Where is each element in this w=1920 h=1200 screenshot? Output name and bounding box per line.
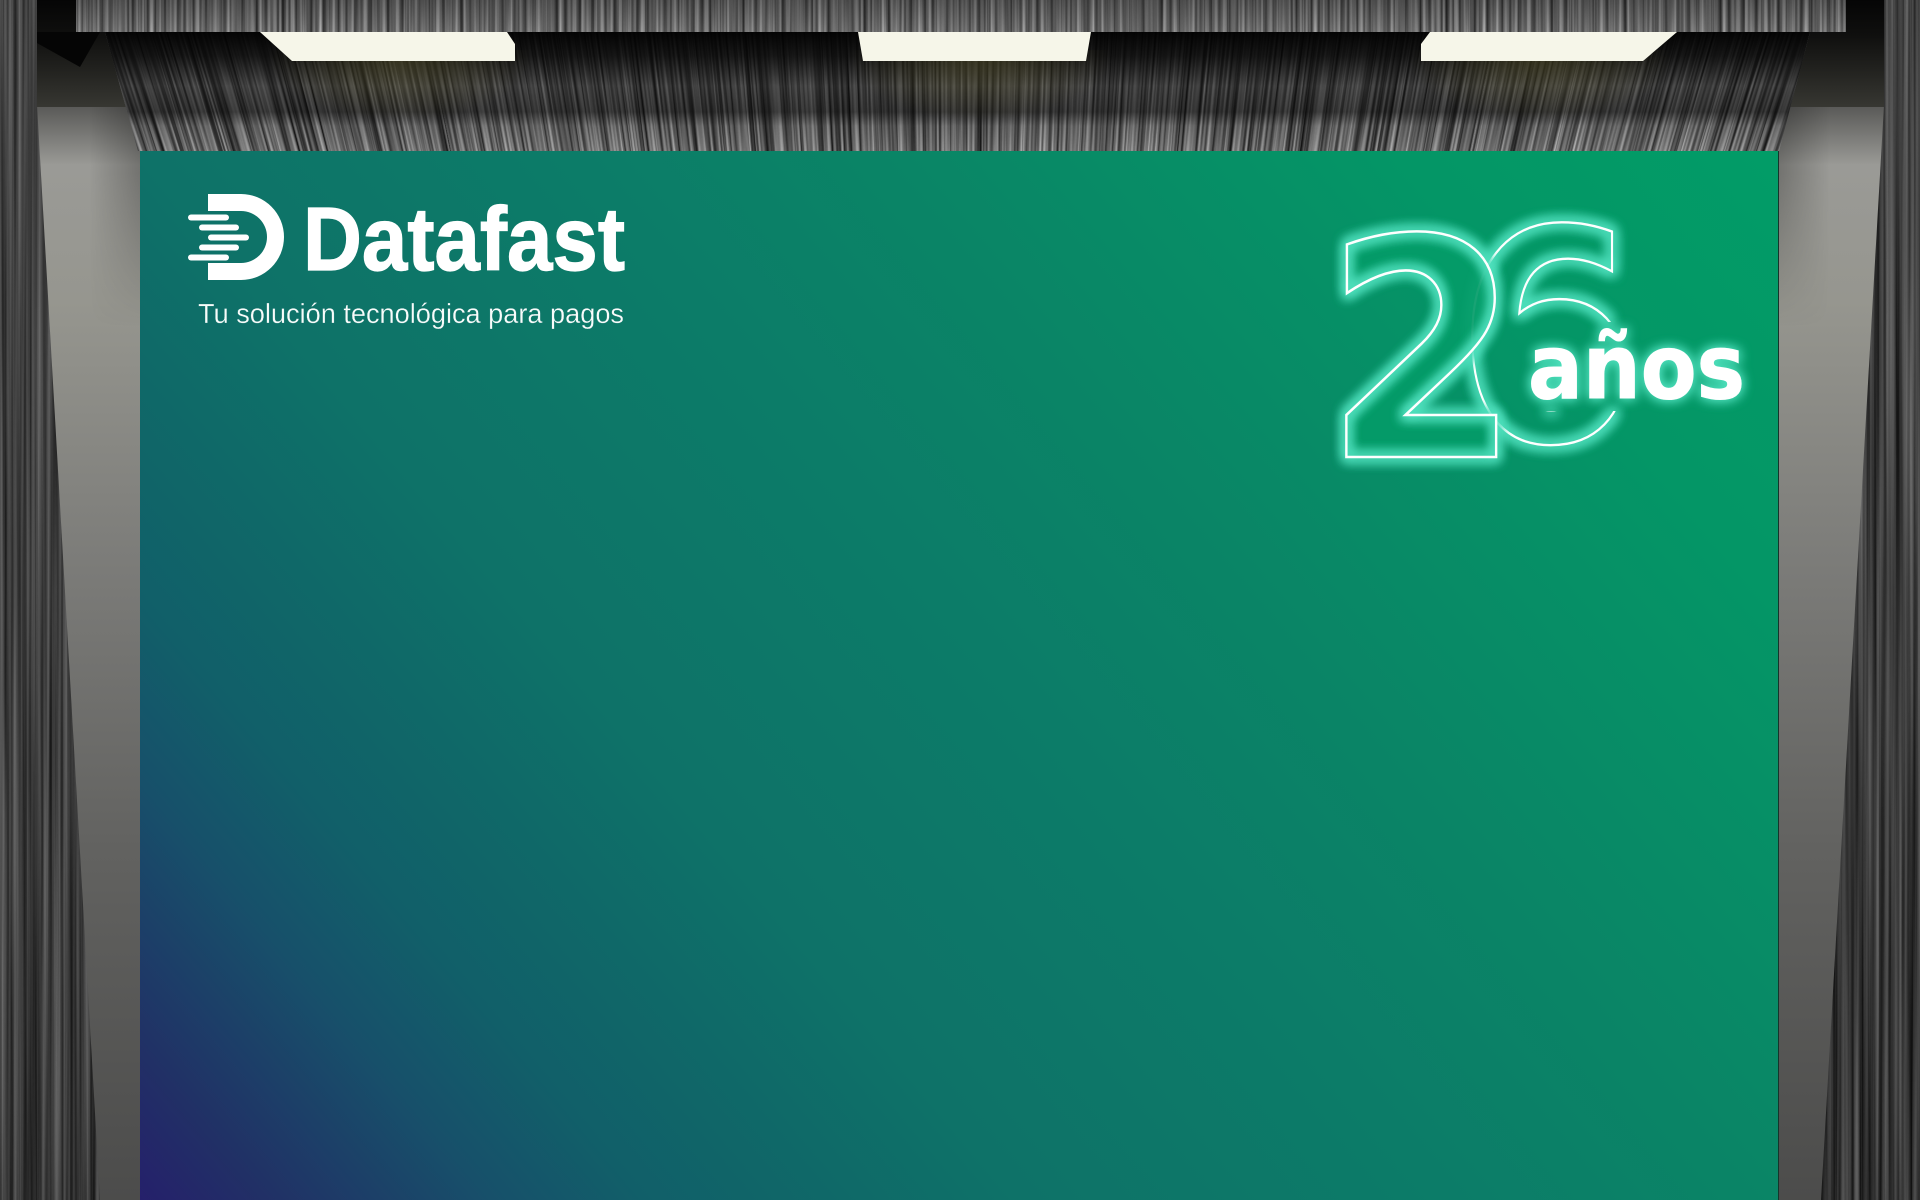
años label: años (1528, 315, 1745, 419)
ceiling light center (858, 32, 1091, 61)
green gradient panel (140, 151, 1779, 1200)
numeral 6 neon outline: 6 (1456, 167, 1639, 511)
anniversary badge: 26 años (1334, 208, 1750, 471)
left wall side shading (100, 107, 140, 294)
ceiling light right (1421, 32, 1677, 61)
ceiling light left (260, 32, 515, 61)
right pillar (1821, 0, 1920, 1200)
back wall upper shadow (0, 0, 1920, 107)
ceiling with perspective streaks (105, 32, 1810, 151)
right wall side shading (1779, 107, 1818, 294)
corner shadow (37, 32, 100, 67)
Datafast logo (188, 190, 625, 329)
numeral 2 mask fill: 2 (1324, 176, 1521, 529)
left pillar (0, 0, 100, 1200)
icon: D with speed lines (188, 194, 284, 280)
wordmark: Datafast (303, 190, 625, 290)
tagline: Tu solución tecnológica para pagos (198, 298, 624, 329)
top header bar (76, 0, 1846, 32)
numeral 2 neon outline: 2 (1324, 176, 1521, 529)
